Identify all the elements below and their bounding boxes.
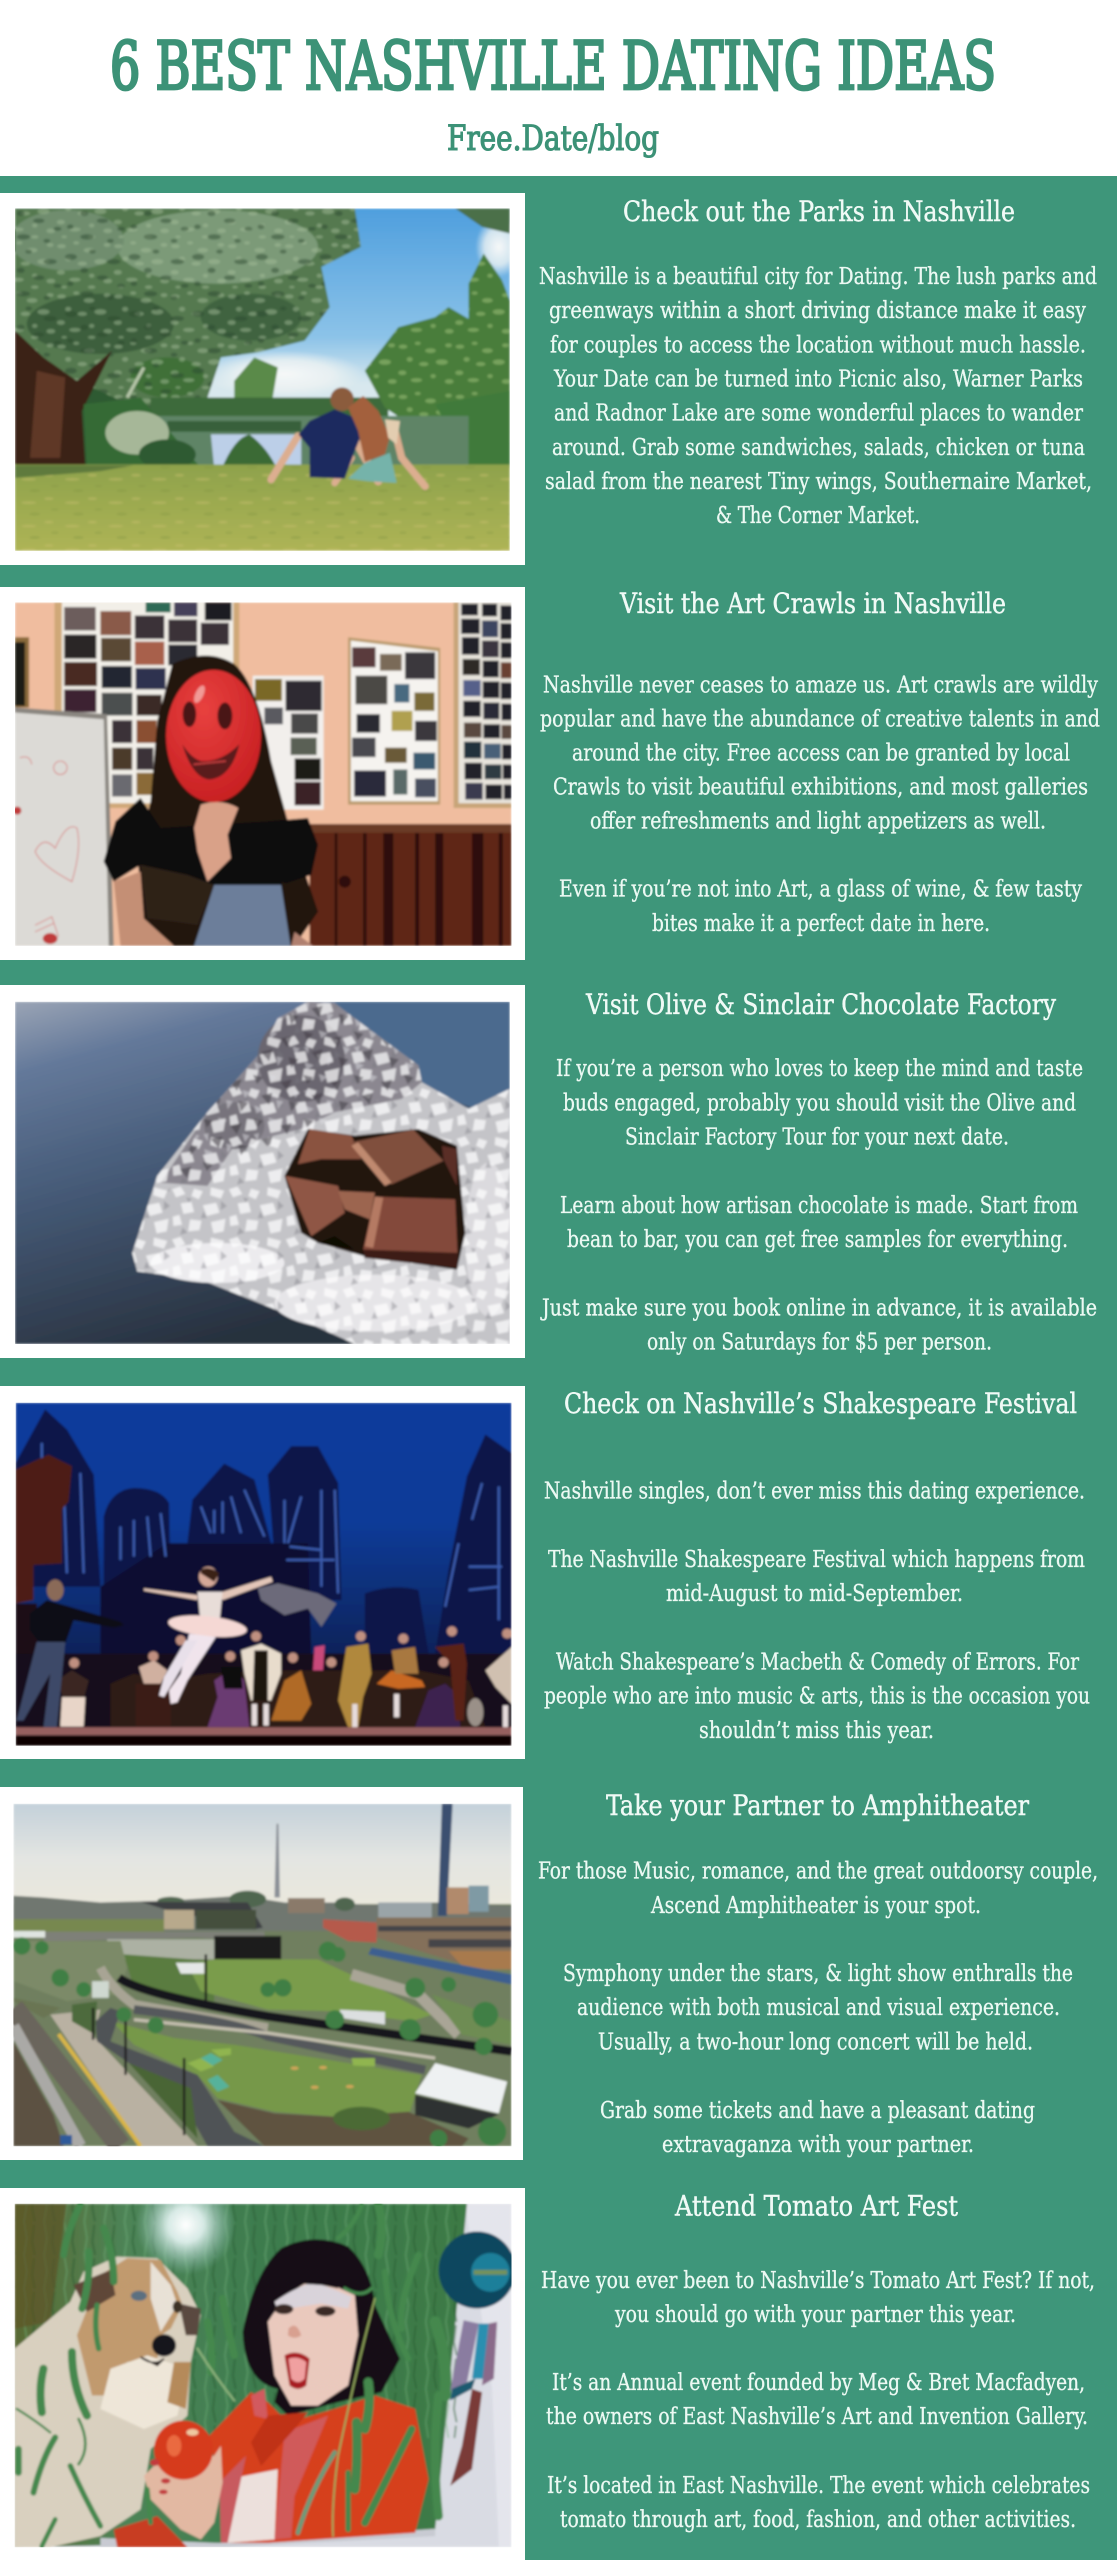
body text: offer refreshments and light appetizers as well. [590, 809, 1046, 835]
body text [541, 2268, 1095, 2533]
photo: couple sitting on park lawn by a lake [15, 208, 510, 551]
panel: parks [0, 193, 1097, 565]
body text: Ascend Amphitheater is your spot. [650, 1893, 981, 1919]
body text: around the city. Free access can be granted by local [572, 740, 1070, 766]
panel: art crawls [0, 587, 1100, 960]
body text: Your Date can be turned into Picnic also, Warner Parks [553, 366, 1083, 392]
heading: Visit Olive & Sinclair Chocolate Factory [585, 988, 1057, 1021]
body text: Crawls to visit beautiful exhibitions, and most galleries [553, 774, 1088, 800]
photo frame: parks [0, 193, 525, 565]
photo: woman in red cape with tomato and collie dog poster [14, 2204, 512, 2548]
body text: buds engaged, probably you should visit the Olive and [563, 1090, 1076, 1116]
photo: ballet dancer leaping on a stage [16, 1402, 512, 1746]
body text [540, 672, 1100, 937]
body text: audience with both musical and visual experience. [577, 1995, 1060, 2021]
photo: person holding smiley balloon in front of photo walls [15, 602, 512, 946]
header band [0, 0, 1117, 176]
body text [539, 264, 1097, 529]
body text: mid-August to mid-September. [666, 1581, 963, 1607]
body text: Sinclair Factory Tour for your next date. [625, 1124, 1009, 1150]
panel: amphitheater [0, 1787, 1098, 2160]
photo: chocolate pieces on crumpled foil [15, 1002, 510, 1344]
photo frame: art crawls [0, 587, 525, 960]
subtitle: Free.Date/blog [447, 119, 659, 159]
body text: greenways within a short driving distance make it easy [549, 298, 1086, 324]
photo frame: chocolate factory [0, 985, 525, 1358]
body text [540, 1056, 1097, 1356]
body text: extravaganza with your partner. [662, 2132, 974, 2158]
body text: Grab some tickets and have a pleasant dating [600, 2098, 1035, 2124]
heading: Check on Nashville’s Shakespeare Festival [564, 1387, 1077, 1420]
body text: for couples to access the location without much hassle. [550, 332, 1086, 358]
body text: shouldn’t miss this year. [699, 1718, 934, 1744]
heading: Check out the Parks in Nashville [623, 195, 1015, 228]
body text: & The Corner Market. [716, 503, 920, 529]
panel: shakespeare festival [0, 1386, 1090, 1759]
heading: Visit the Art Crawls in Nashville [619, 587, 1006, 620]
photo frame: tomato art fest [0, 2188, 525, 2560]
heading: Attend Tomato Art Fest [674, 2190, 958, 2223]
heading: Take your Partner to Amphitheater [606, 1789, 1030, 1822]
panel: chocolate factory [0, 985, 1097, 1358]
body text [544, 1479, 1090, 1744]
body text: only on Saturdays for $5 per person. [647, 1330, 992, 1356]
panel: tomato art fest [0, 2175, 1095, 2560]
body text: tomato through art, food, fashion, and other activities. [560, 2507, 1076, 2533]
photo frame: shakespeare festival [0, 1386, 525, 1759]
body text: bean to bar, you can get free samples for everything. [567, 1227, 1068, 1253]
body text: Symphony under the stars, & light show enthralls the [563, 1961, 1073, 1987]
photo: aerial view of Ascend Amphitheater park [13, 1804, 512, 2146]
body text: Usually, a two-hour long concert will be held. [598, 2030, 1033, 2056]
photo frame: amphitheater [0, 1787, 523, 2160]
body text: bites make it a perfect date in here. [652, 911, 990, 937]
body text: you should go with your partner this year. [614, 2302, 1016, 2328]
body text [538, 1859, 1098, 2158]
